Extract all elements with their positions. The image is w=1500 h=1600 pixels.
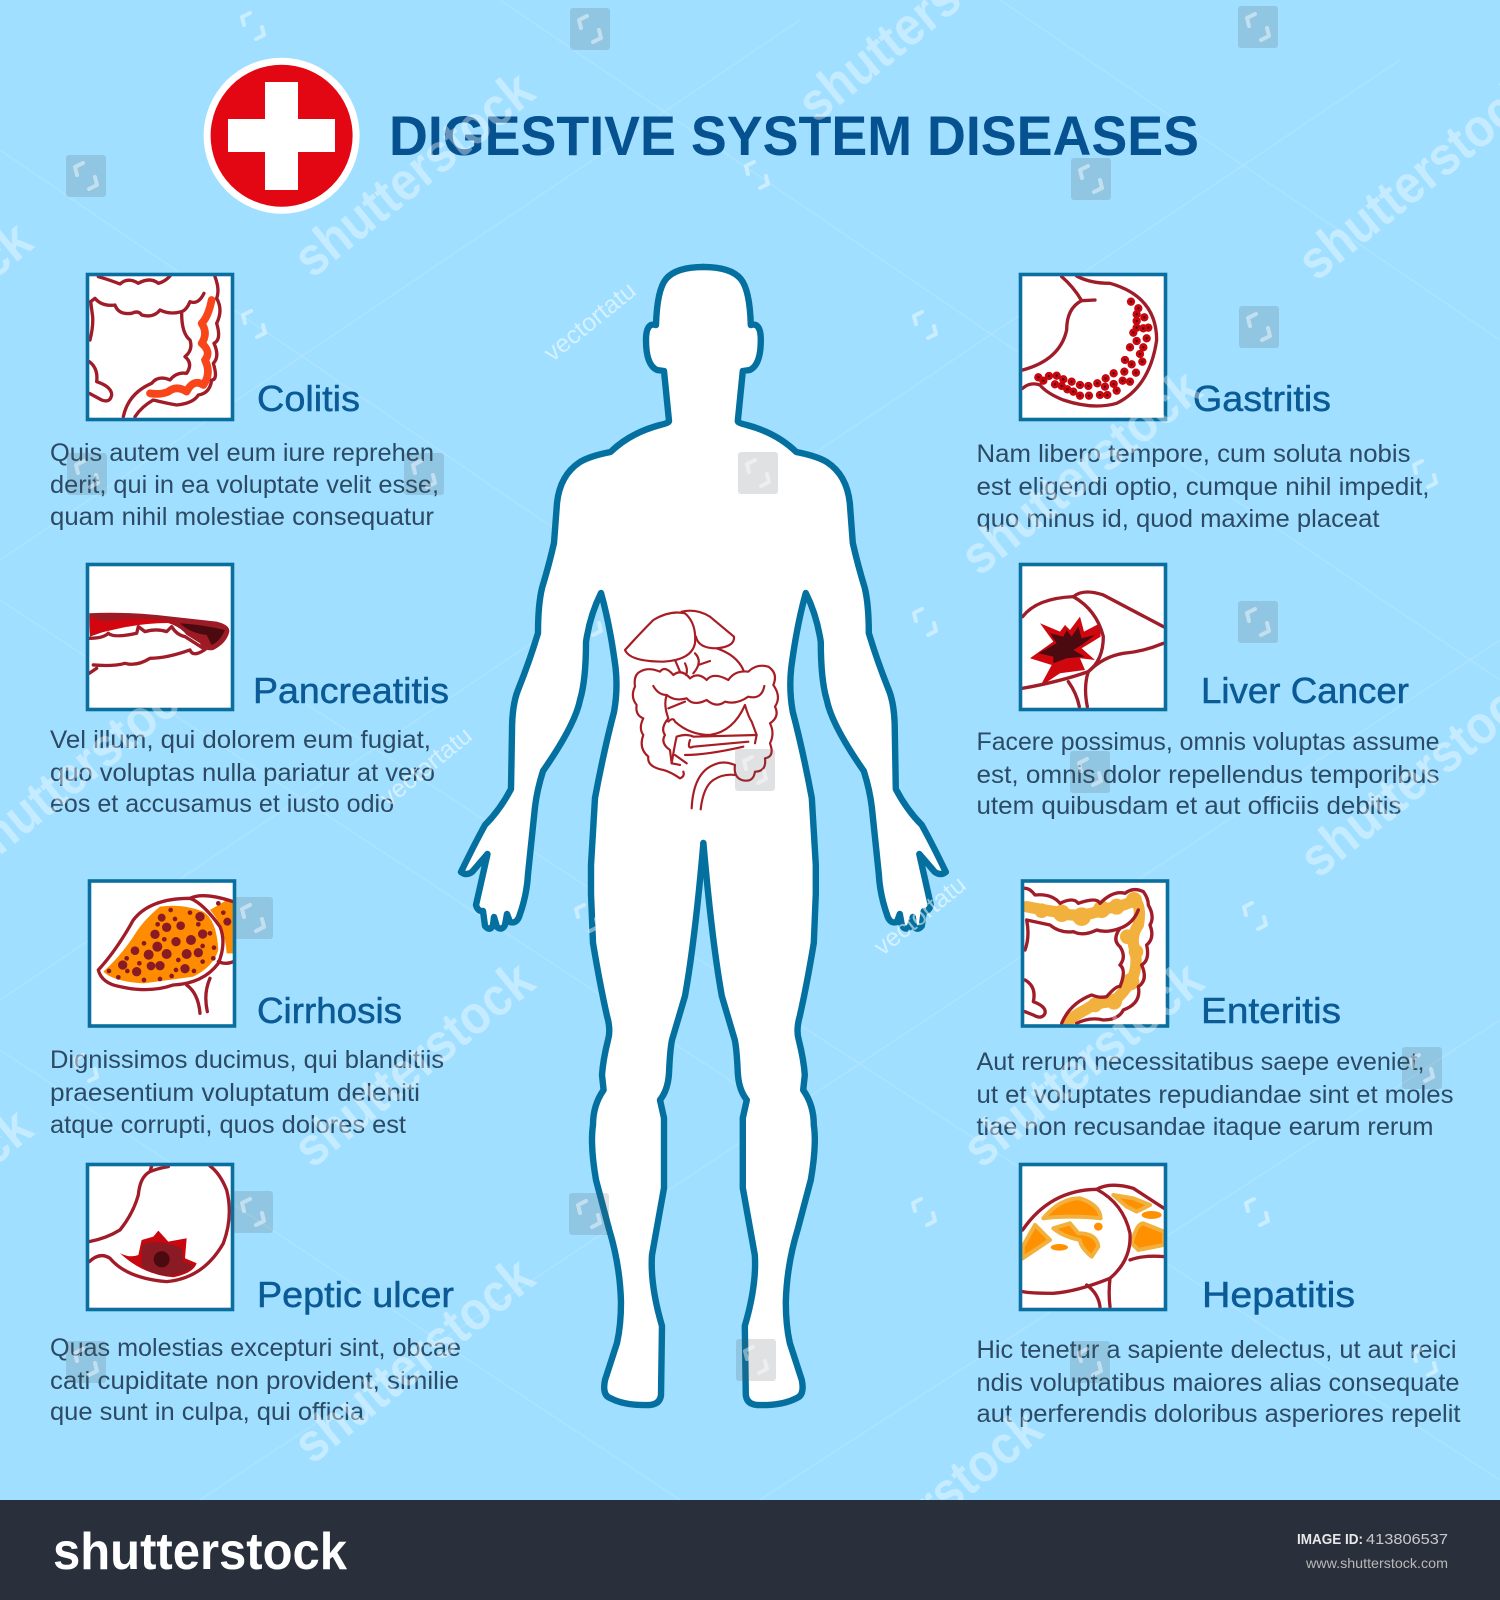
icon: gastritis [1020,274,1166,420]
heading: Liver Cancer: Liver Cancer [1201,670,1409,711]
watermark: shutterstock diagonal text: shutterstock [282,59,546,289]
watermark: shutterstock diagonal text: vectortatu [374,721,477,812]
icon: medical cross badge [204,58,360,214]
heading: Cirrhosis: Cirrhosis [257,990,402,1031]
heading: Pancreatitis: Pancreatitis [253,670,449,711]
icon: liver cancer [1020,564,1166,710]
watermark: shutterstock diagonal text: shutterstock [951,949,1215,1179]
image id [1297,1531,1448,1548]
image id: 413806537 [1366,1531,1448,1548]
heading: Enteritis: Enteritis [1201,990,1341,1031]
footer logo: shutterstock [53,1523,347,1581]
text block: Pancreatitis: Vel illum, qui dolorem eum fugiat, [50,726,431,754]
text block: Cirrhosis: praesentium voluptatum deleniti [50,1079,420,1107]
text block: Pancreatitis: eos et accusamus et iusto odio [50,790,394,818]
text block: Peptic ulcer: Quas molestias excepturi sint, obcae [50,1334,461,1362]
panel: Peptic ulcer [50,1164,461,1426]
digestive organs in body [625,611,778,809]
text block: Colitis [50,439,439,531]
watermark: shutterstock diagonal text: shutterstock [282,1245,546,1475]
text block: Liver Cancer: utem quibusdam et aut officiis debitis [976,792,1402,820]
text block: Peptic ulcer: cati cupiditate non provident, similie [50,1367,459,1395]
text block: Cirrhosis [50,1046,444,1139]
watermark: shutterstock diagonal text: vectortatu [538,276,641,367]
panel: Hepatitis [976,1164,1461,1428]
title: DIGESTIVE SYSTEM DISEASES [389,104,1199,167]
text block: Gastritis [976,440,1430,533]
text block: Colitis: derit, qui in ea voluptate velit esse, [50,471,439,499]
text block: Peptic ulcer [50,1334,461,1426]
panel: Enteritis [976,881,1454,1141]
text block: Peptic ulcer: que sunt in culpa, qui officia [50,1398,364,1426]
text block: Liver Cancer: Facere possimus, omnis voluptas assume [976,728,1440,756]
text block: Gastritis: Nam libero tempore, cum soluta nobis [976,440,1410,468]
watermark: stock square marks [66,6,1442,1383]
panel: Pancreatitis [50,564,449,818]
heading: Colitis: Colitis [257,378,360,419]
icon: colitis [88,274,232,420]
icon: peptic ulcer [88,1164,232,1310]
text block: Colitis: quam nihil molestiae consequatur [50,503,434,531]
icon: hepatitis [1020,1164,1166,1310]
icon: pancreatitis [88,564,232,710]
footer bar [0,1500,1500,1600]
text block: Cirrhosis: Dignissimos ducimus, qui blanditiis [50,1046,444,1074]
text block: Pancreatitis: quo voluptas nulla pariatur at vero [50,759,435,787]
text block: Liver Cancer: est, omnis dolor repellendus temporibus [976,761,1440,789]
heading: Hepatitis: Hepatitis [1202,1274,1355,1315]
text block: Colitis: Quis autem vel eum iure reprehen [50,439,434,467]
text block: Enteritis: Aut rerum necessitatibus saepe eveniet, [976,1048,1424,1076]
text block: Gastritis: est eligendi optio, cumque nihil impedit, [976,473,1430,501]
panel: Liver Cancer [976,564,1440,820]
text block: Gastritis: quo minus id, quod maxime placeat [976,505,1380,533]
watermark: shutterstock diagonal text: shutterstock [282,949,546,1179]
website url: www.shutterstock.com [1305,1555,1448,1571]
text block: Enteritis: ut et voluptates repudiandae sint et moles [976,1081,1454,1109]
panel: Colitis [50,274,439,531]
human body silhouette [461,267,946,1405]
text block: Hepatitis [976,1336,1461,1428]
watermark: shutterstock diagonal text: vectortatu [868,870,971,961]
text block: Pancreatitis [50,726,435,818]
text block: Enteritis: tiae non recusandae itaque earum rerum [976,1113,1434,1141]
image id: IMAGE ID: [1297,1531,1363,1548]
icon: cirrhosis [90,881,234,1026]
panel: Gastritis [976,274,1430,533]
text block: Liver Cancer [976,728,1440,820]
watermark: shutterstock diagonal text: shutterstock [949,357,1213,587]
heading: Peptic ulcer: Peptic ulcer [257,1274,454,1315]
text block: Hepatitis: aut perferendis doloribus asperiores repelit [976,1400,1461,1428]
icon: enteritis [1022,881,1168,1026]
text block: Hepatitis: ndis voluptatibus maiores alias consequate [976,1369,1460,1397]
text block: Enteritis [976,1048,1454,1141]
heading: Gastritis: Gastritis [1193,378,1331,419]
text block: Hepatitis: Hic tenetur a sapiente delectus, ut aut reici [976,1336,1456,1364]
panel: Cirrhosis [50,881,444,1139]
text block: Cirrhosis: atque corrupti, quos dolores est [50,1111,406,1139]
